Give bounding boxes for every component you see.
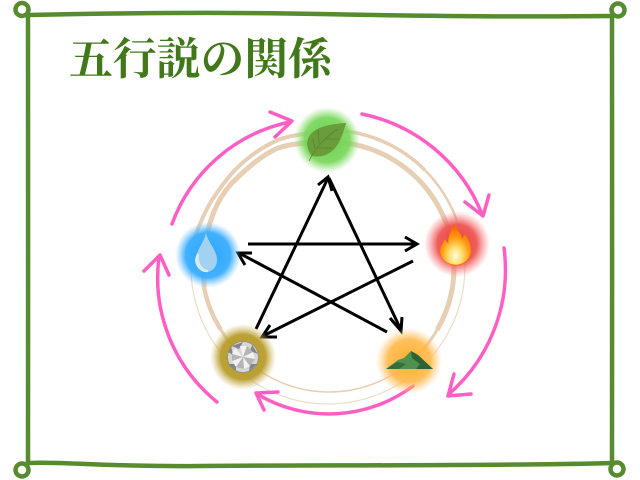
icon: leaf bbox=[307, 123, 346, 161]
arrow: water to fire bbox=[248, 237, 417, 251]
arrow: wood to earth bbox=[329, 178, 402, 331]
node: metal bbox=[210, 324, 276, 390]
pink generation arrows bbox=[144, 112, 505, 414]
node: fire bbox=[424, 211, 490, 277]
node: water bbox=[175, 222, 241, 288]
pentagram arrows bbox=[238, 177, 417, 337]
arrow: wood to fire bbox=[362, 114, 489, 216]
arrow: earth to metal bbox=[256, 386, 413, 414]
arrow: fire to metal bbox=[262, 261, 413, 337]
cycle rings bbox=[191, 130, 465, 404]
icon: mountain bbox=[386, 351, 433, 369]
icon: diamond bbox=[228, 342, 258, 372]
arrow: water to wood bbox=[172, 112, 292, 224]
arrow: metal to wood bbox=[256, 177, 332, 329]
icon: water drop bbox=[196, 233, 217, 272]
title: 五行説の関係 bbox=[69, 35, 335, 84]
arrow: earth to water bbox=[238, 253, 387, 332]
arrow: metal to water bbox=[144, 255, 217, 402]
node: earth bbox=[376, 328, 442, 394]
node: wood bbox=[294, 107, 360, 173]
arrow: fire to earth bbox=[448, 248, 505, 396]
icon: flame bbox=[440, 224, 471, 265]
